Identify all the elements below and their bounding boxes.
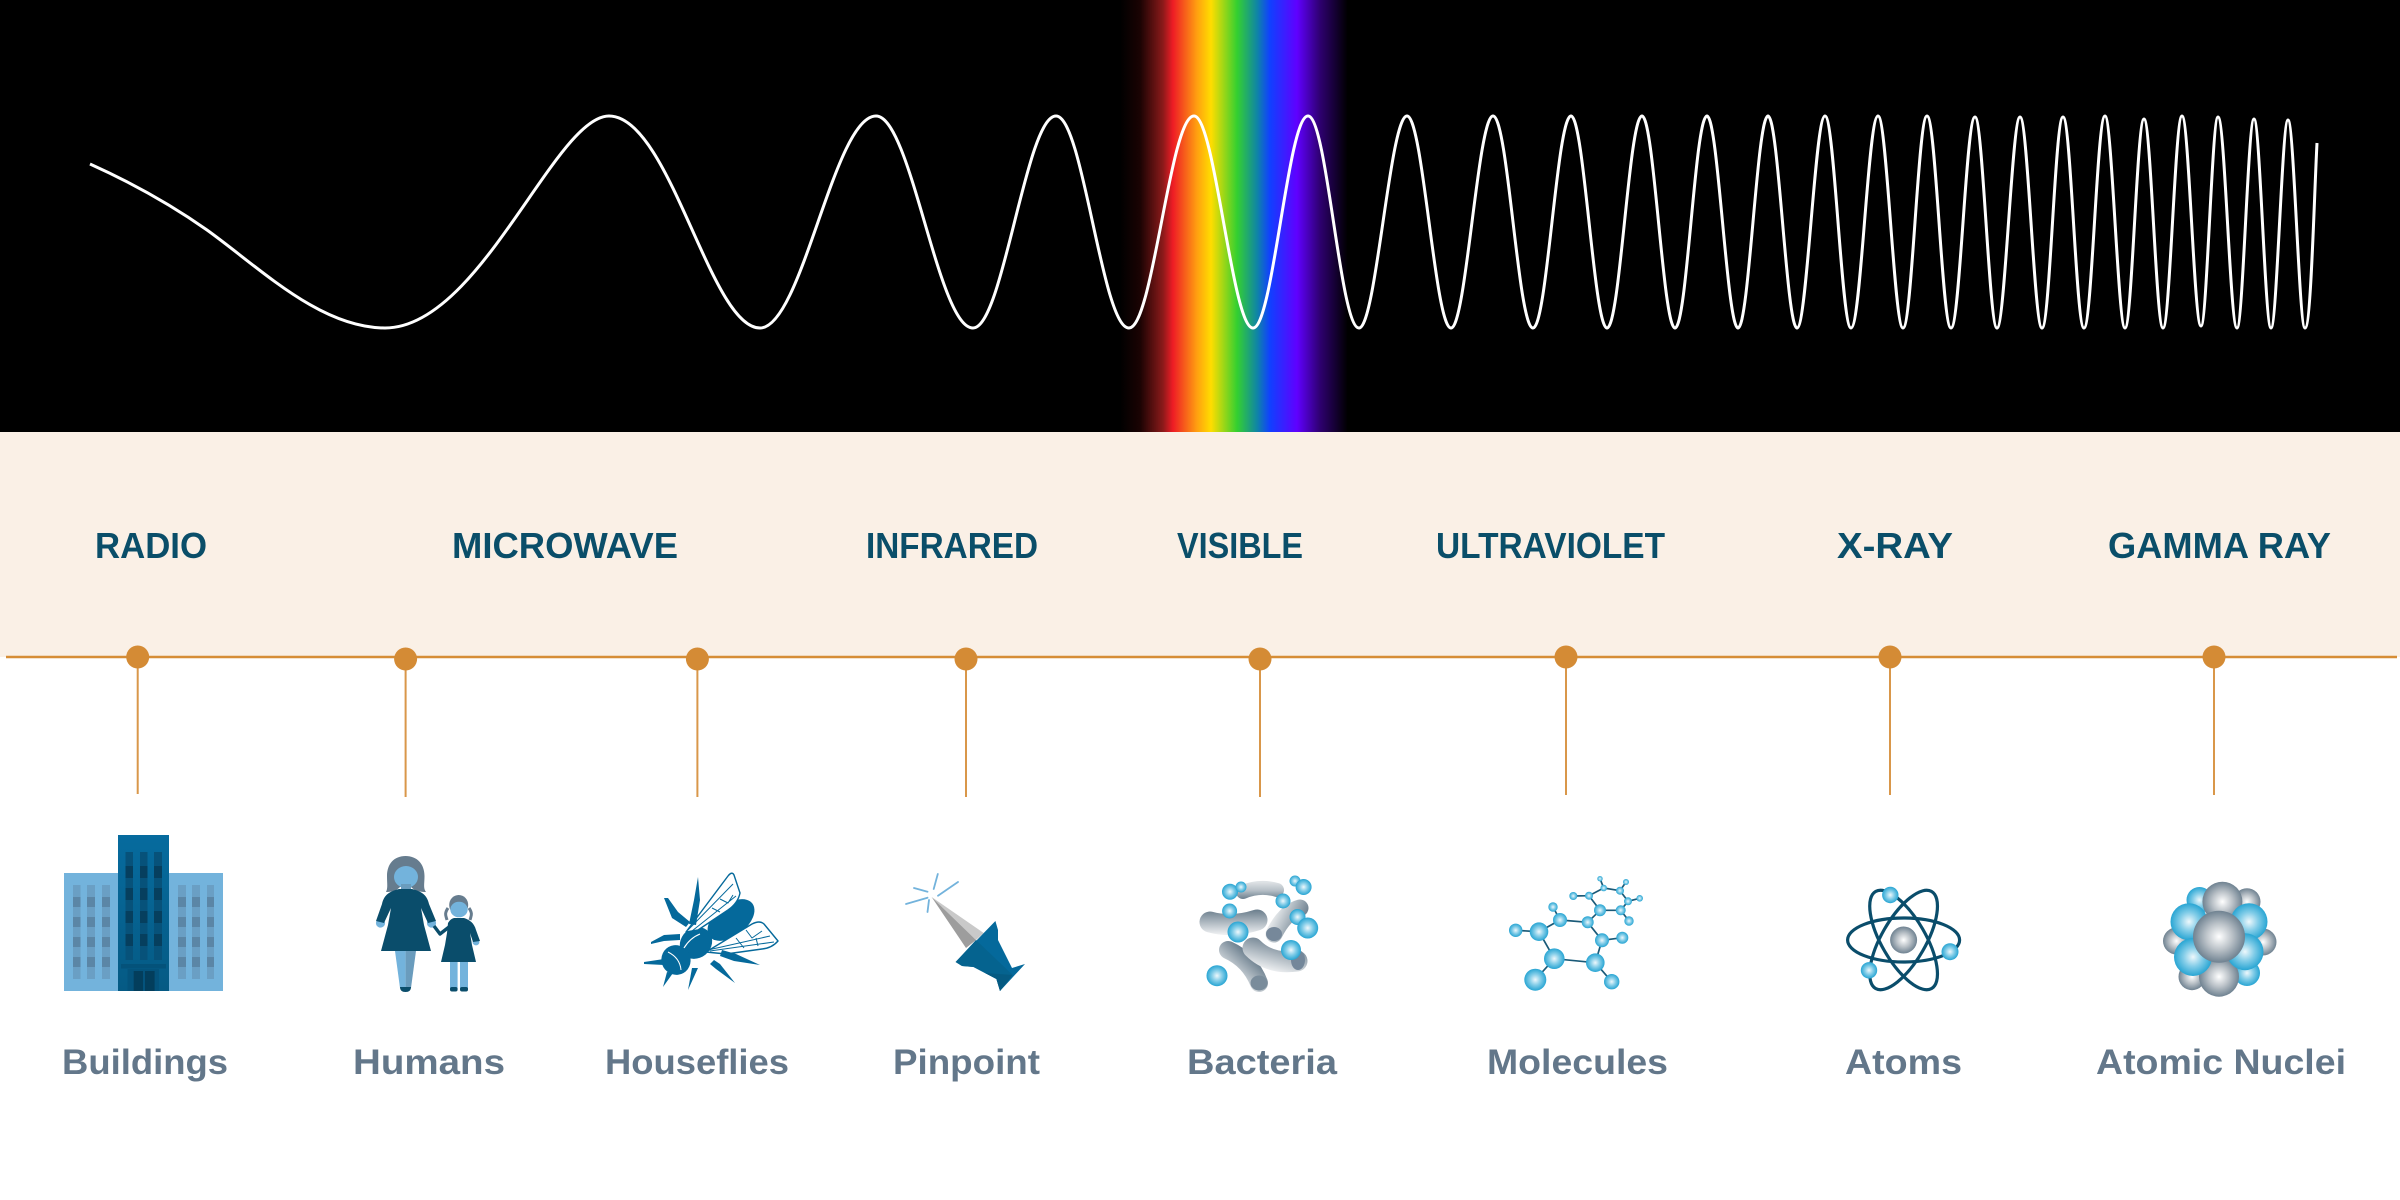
heading: x-ray: X-RAY <box>1837 525 1953 566</box>
body <box>656 891 762 980</box>
heading: infrared: INFRARED <box>866 525 1038 566</box>
wings <box>686 873 778 954</box>
icon: pinpoint <box>906 874 1025 991</box>
legs <box>644 877 760 990</box>
girl <box>434 895 480 992</box>
icon: bacteria <box>1206 876 1318 990</box>
label: atomic nuclei: Atomic Nuclei <box>2096 1043 2346 1082</box>
icon: molecules <box>1509 876 1643 991</box>
panel: spectrum wave band <box>0 0 2400 432</box>
heading: ultraviolet: ULTRAVIOLET <box>1436 525 1665 566</box>
heading: microwave: MICROWAVE <box>452 525 678 566</box>
sparks <box>906 874 958 912</box>
label: atoms: Atoms <box>1845 1043 1962 1082</box>
woman <box>376 856 436 992</box>
label: humans: Humans <box>353 1043 505 1082</box>
label: pinpoint: Pinpoint <box>893 1043 1040 1082</box>
icon: atoms <box>1848 881 1960 999</box>
label: molecules: Molecules <box>1487 1043 1668 1082</box>
spheres <box>1206 876 1318 986</box>
icon: housefly <box>644 873 778 990</box>
visible light rainbow gradient <box>1120 0 1350 432</box>
rods <box>1210 888 1300 983</box>
label: bacteria: Bacteria <box>1187 1043 1338 1082</box>
heading: gamma ray: GAMMA RAY <box>2108 525 2331 566</box>
timeline with markers <box>6 646 2397 797</box>
heading: visible: VISIBLE <box>1177 525 1303 566</box>
labels: scale objects <box>62 1043 2346 1082</box>
label: houseflies: Houseflies <box>605 1043 789 1082</box>
headings: spectrum names <box>95 525 2331 566</box>
chirped white wave <box>90 116 2317 328</box>
black background <box>0 0 2400 432</box>
icon: humans <box>376 856 480 992</box>
heading: radio: RADIO <box>95 525 207 566</box>
panel: cream heading band <box>0 432 2400 657</box>
icon: atomic nuclei <box>2163 882 2276 997</box>
label: buildings: Buildings <box>62 1043 228 1082</box>
icon: buildings <box>64 835 223 991</box>
